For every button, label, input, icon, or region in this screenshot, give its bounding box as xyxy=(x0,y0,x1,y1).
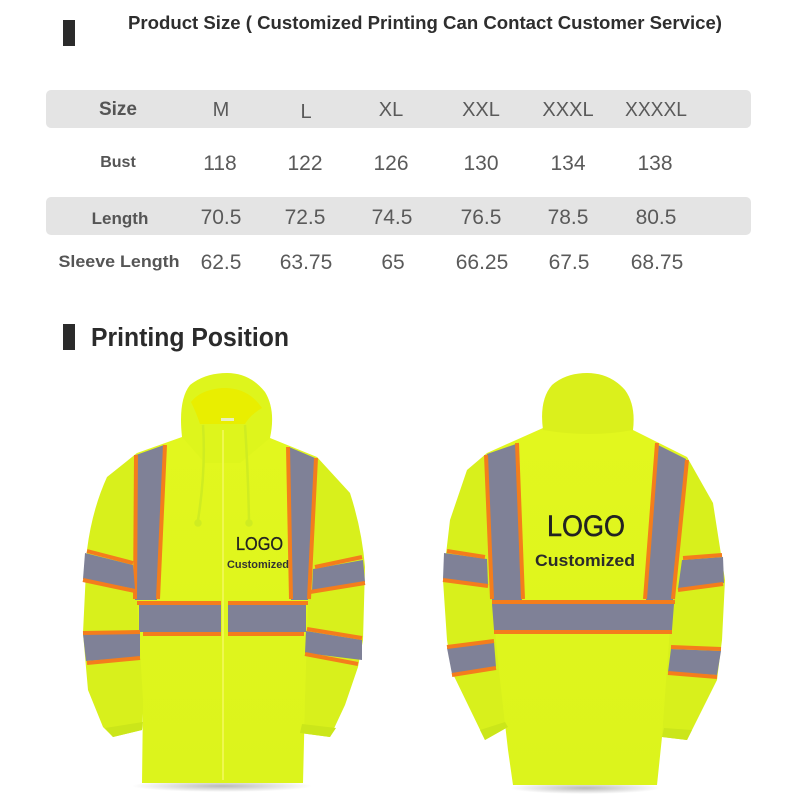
row: length: 74.5 xyxy=(372,206,412,229)
ground shadow xyxy=(510,782,660,794)
cuffs xyxy=(480,722,692,740)
row: bust: 130 xyxy=(463,152,499,175)
front sleeve bands xyxy=(83,551,365,664)
front logo text: Customized xyxy=(227,559,289,571)
row: sleeve length: Sleeve Length xyxy=(58,253,180,271)
heading marker bar xyxy=(63,20,75,46)
row: size xyxy=(99,99,687,123)
row: bust: 126 xyxy=(373,152,409,175)
row: bust: 118 xyxy=(203,152,237,175)
front sleeves xyxy=(83,453,365,737)
row: length: 70.5 xyxy=(201,206,241,229)
row: size: M xyxy=(213,99,229,121)
front body xyxy=(137,437,317,783)
size chart section xyxy=(46,12,751,352)
row: bust: 138 xyxy=(637,152,673,175)
row: size: L xyxy=(300,101,312,123)
back sleeves xyxy=(443,453,725,740)
back logo text xyxy=(535,510,635,570)
row: size: XL xyxy=(379,99,403,121)
row: bust: 134 xyxy=(550,152,586,175)
back hood xyxy=(542,373,634,434)
front vertical straps xyxy=(135,445,316,600)
back sleeve bands xyxy=(443,551,724,677)
row: size: XXL xyxy=(462,99,500,121)
row: length: 80.5 xyxy=(636,206,676,229)
row: sleeve length: 62.5 xyxy=(201,251,241,274)
hood opening xyxy=(191,388,262,424)
row: sleeve length: 68.75 xyxy=(631,251,683,274)
front logo text xyxy=(227,534,289,571)
row: length: Length xyxy=(92,209,148,228)
back body xyxy=(487,428,687,785)
row: sleeve length: 67.5 xyxy=(549,251,589,274)
heading: printing position: Printing Position xyxy=(91,324,289,352)
table row band: length xyxy=(46,197,751,235)
front chest band xyxy=(137,603,308,634)
back logo text: Customized xyxy=(535,551,635,570)
row: length: 76.5 xyxy=(461,206,501,229)
drawcords xyxy=(196,425,252,526)
table row band: size xyxy=(46,90,751,128)
row: length xyxy=(92,206,676,229)
row: bust: 122 xyxy=(287,152,323,175)
row: sleeve length: 65 xyxy=(381,251,405,274)
front jacket xyxy=(83,373,365,792)
hood tag xyxy=(221,418,234,421)
row: length: 72.5 xyxy=(285,206,325,229)
front hood xyxy=(181,373,272,463)
row: bust xyxy=(100,152,673,175)
back waist band xyxy=(492,602,675,632)
row: size: XXXL xyxy=(542,99,594,121)
front logo text: LOGO xyxy=(236,534,283,554)
row: length: 78.5 xyxy=(548,206,588,229)
zipper xyxy=(222,430,224,780)
row: sleeve length: 63.75 xyxy=(280,251,332,274)
back logo text: LOGO xyxy=(547,510,625,543)
cuffs xyxy=(105,722,336,737)
ground shadow xyxy=(132,780,312,792)
row: sleeve length xyxy=(58,251,683,274)
title: product size: Product Size ( Customized Printing Can Contact Customer Service) xyxy=(128,12,722,33)
back jacket xyxy=(443,373,725,794)
row: size: XXXXL xyxy=(625,99,687,121)
row: bust: Bust xyxy=(100,154,136,171)
back vertical straps xyxy=(486,443,687,600)
heading marker bar xyxy=(63,324,75,350)
row: sleeve length: 66.25 xyxy=(456,251,508,274)
row: size: Size xyxy=(99,99,137,120)
